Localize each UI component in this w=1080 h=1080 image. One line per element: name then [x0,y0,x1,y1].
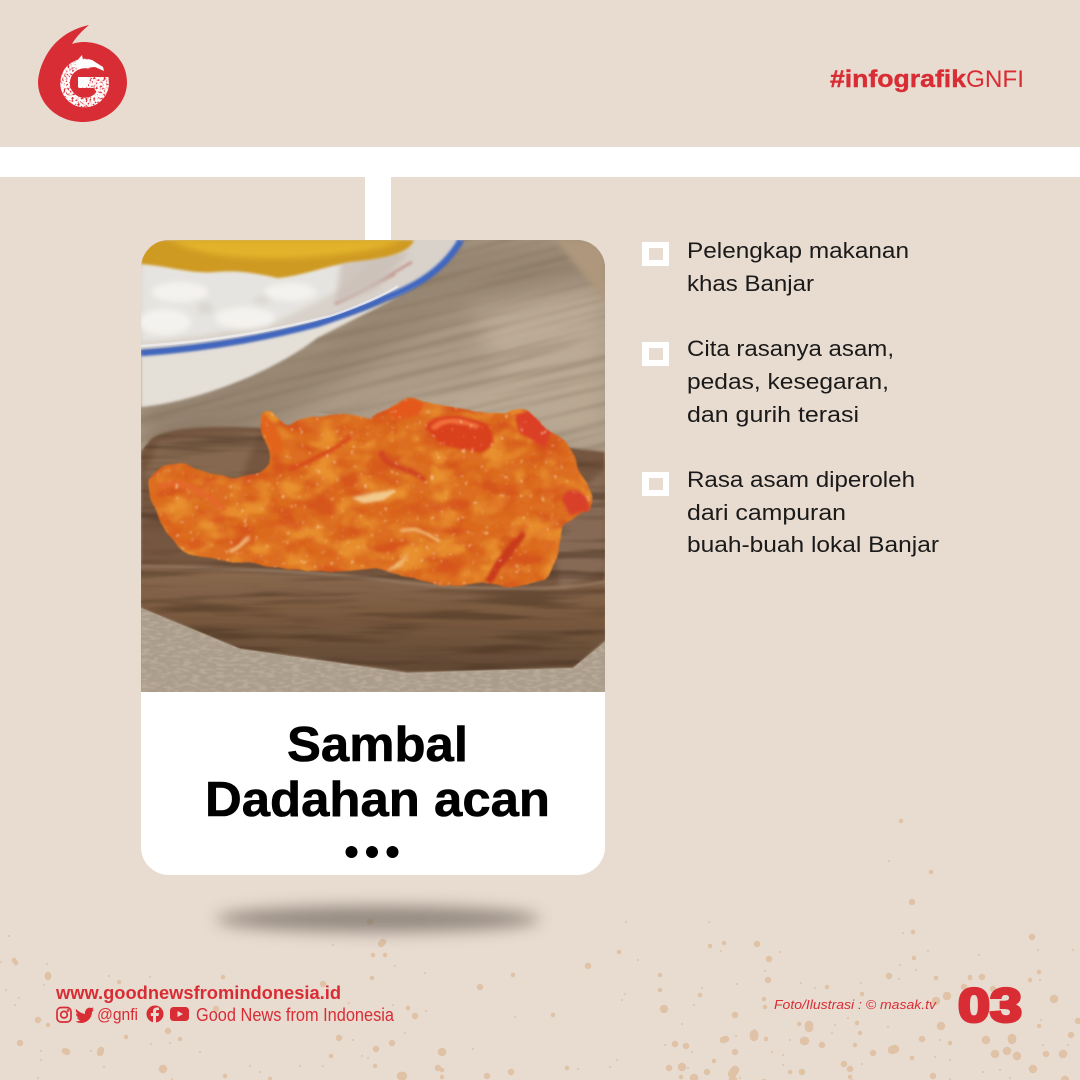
bullet 3 text: buah-buah lokal Banjar [687,532,939,557]
photo credit: Foto/Ilustrasi : © masak.tv [774,997,938,1012]
icon: youtube [170,1007,189,1021]
white connector stem [365,177,391,241]
bullet 1 icon [642,242,669,266]
bullet 2 text: pedas, kesegaran, [687,369,889,394]
panel: white card [141,240,605,875]
bullet 2 text: Cita rasanya asam, [687,336,894,361]
bullet 3 text [687,467,939,557]
plate body [141,296,400,407]
hashtag heading: #infografik [830,66,967,93]
bullet 3 text: Rasa asam diperoleh [687,467,915,492]
table wood grain [141,240,605,450]
photo: sambal on wooden dish [141,240,605,692]
bullet 1 text [687,238,909,296]
bullet 1 text: khas Banjar [687,271,814,296]
bullet 3 icon [642,472,669,496]
icon: facebook [146,1006,164,1023]
background paint speckles [1,821,1078,1080]
website url: www.goodnewsfromindonesia.id [55,982,341,1003]
white top band [0,147,1080,177]
icon: GNFI logo [38,25,127,122]
bullet 1 text: Pelengkap makanan [687,238,909,263]
bottom woven mat [141,608,605,674]
hashtag heading [830,66,1024,93]
enamel blue rim [141,240,461,353]
wooden dish [141,425,605,672]
bullet list [642,238,939,557]
card shadow [216,906,540,932]
social page name: Good News from Indonesia [196,1005,395,1025]
yellow rice topping [141,240,414,278]
sambal [141,395,605,595]
bullet 3 text: dari campuran [687,500,846,525]
hashtag heading: GNFI [966,66,1024,93]
dish title [205,718,550,827]
page number: 03 [958,978,1022,1032]
bullet 2 text: dan gurih terasi [687,402,859,427]
title line 2: Dadahan acan [205,773,550,827]
bullet 2 text [687,336,894,427]
dish wood grain [141,425,605,675]
bullet 2 icon [642,342,669,366]
social handle: @gnfi [97,1006,138,1024]
ellipsis dots [346,846,398,858]
corner object [560,240,605,291]
rice [141,264,342,342]
icon: instagram [57,1008,71,1022]
icon: twitter [76,1008,94,1023]
title line 1: Sambal [287,718,468,772]
